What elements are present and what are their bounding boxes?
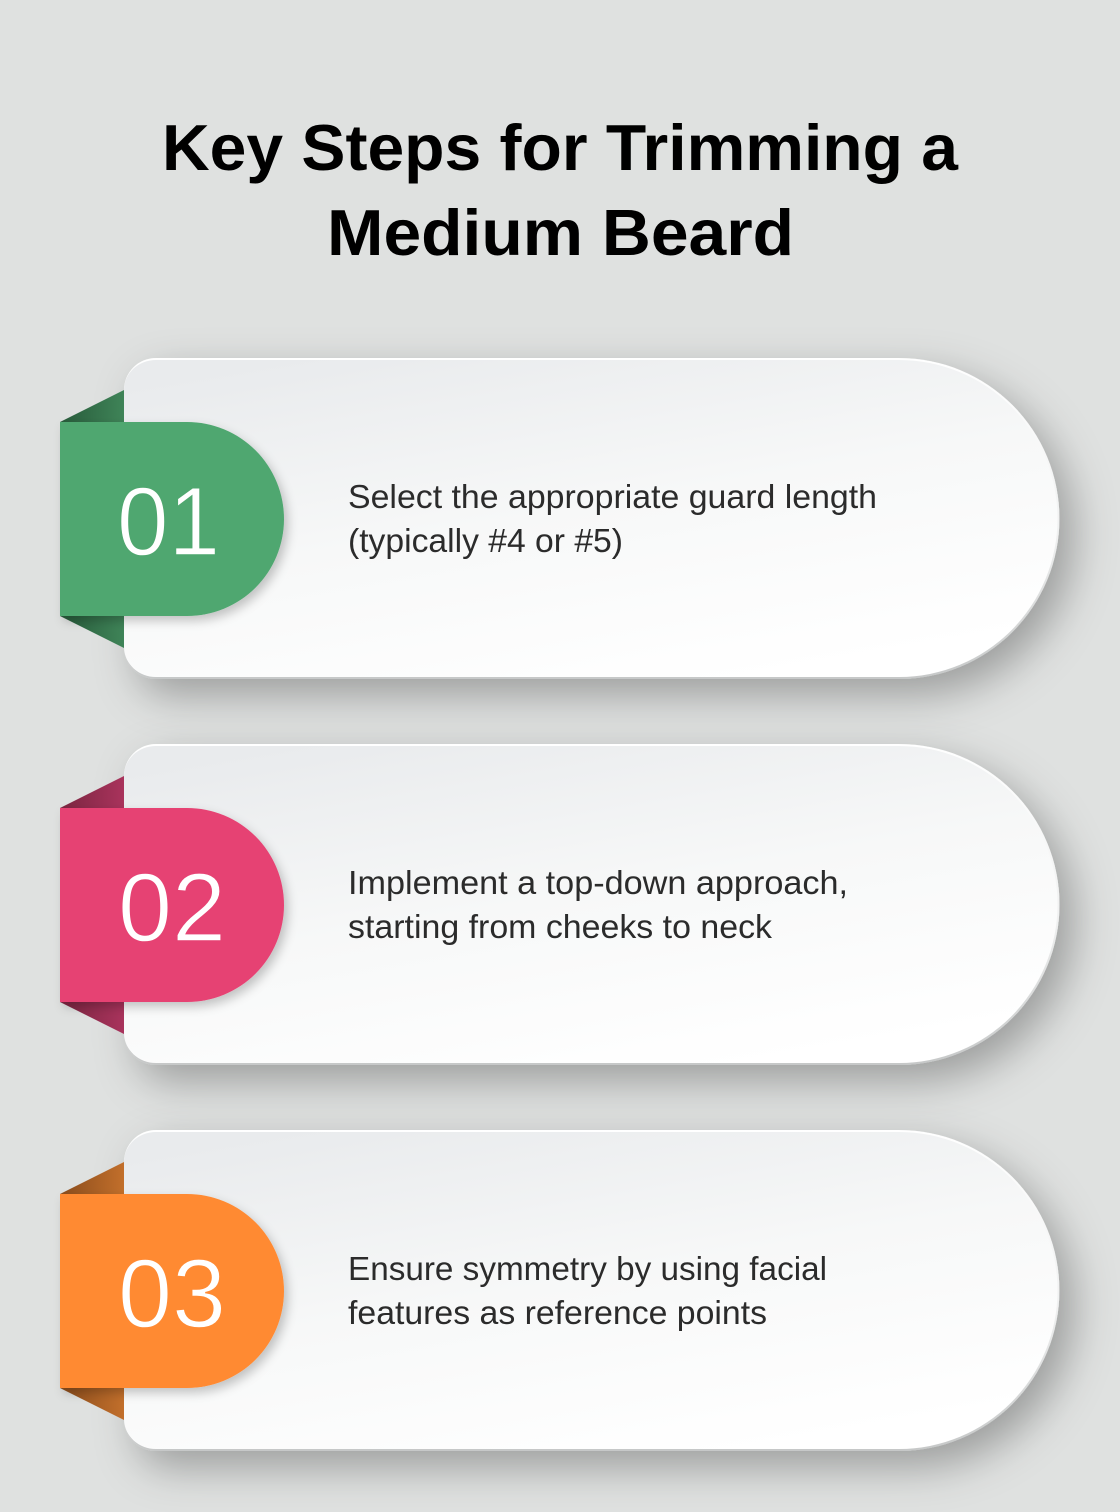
- ribbon fold: step 01: [60, 390, 124, 648]
- number: 03: 03: [118, 1239, 226, 1348]
- ribbon fold: step 02: [60, 776, 124, 1034]
- badge: step 03: [60, 1194, 284, 1388]
- card: step 03: [124, 1130, 1059, 1451]
- panel: step 02: [60, 744, 1060, 1065]
- badge: step 02: [60, 808, 284, 1002]
- panel: step 03: [60, 1130, 1059, 1451]
- text: step 03: features as reference points: [348, 1295, 767, 1332]
- title: Key Steps for Trimming a: [162, 111, 959, 184]
- number: 01: 01: [117, 467, 220, 576]
- title: Medium Beard: [327, 196, 794, 269]
- card: step 01: [124, 358, 1059, 679]
- ribbon fold: step 03: [60, 1162, 124, 1420]
- text: step 02: Implement a top-down approach,: [348, 865, 848, 902]
- text: step 03: Ensure symmetry by using facial: [348, 1251, 827, 1288]
- title: [162, 111, 959, 269]
- text: step 02: starting from cheeks to neck: [348, 909, 772, 946]
- text: step 01: (typically #4 or #5): [348, 523, 623, 560]
- panel: step 01: [60, 358, 1059, 679]
- card: step 02: [124, 744, 1060, 1065]
- badge: step 01: [60, 422, 284, 616]
- text: step 01: Select the appropriate guard length: [348, 479, 877, 516]
- number: 02: 02: [118, 853, 226, 962]
